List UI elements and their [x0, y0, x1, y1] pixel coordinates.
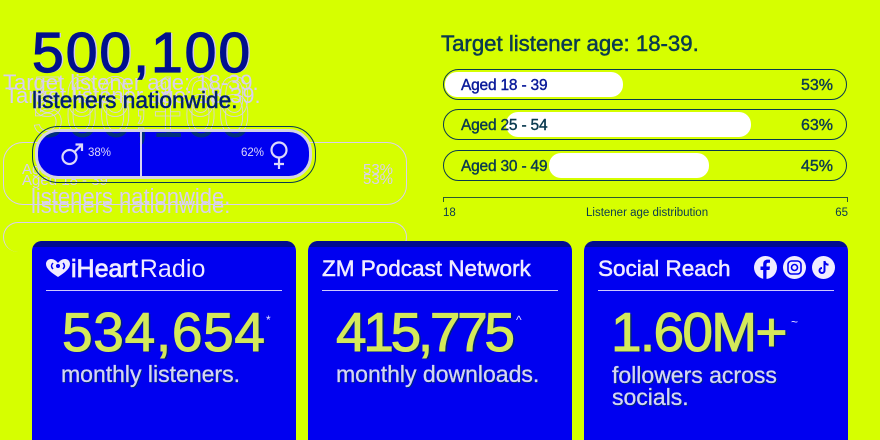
- stat number: 1.60M+: [611, 301, 786, 363]
- icon: female symbol: [270, 141, 288, 169]
- ghost artefact layer: 53%: [363, 171, 393, 188]
- panel: ZM Podcast Network: [308, 241, 572, 440]
- headline caption: listeners nationwide.: [32, 87, 238, 113]
- female share: 62%: [241, 147, 264, 159]
- gender divider: [140, 130, 142, 178]
- age bar: 25-54: 63%: [801, 117, 833, 134]
- ghost artefact layer: Target listener age: 18-39.: [5, 83, 261, 108]
- age heading: Target listener age: 18-39.: [441, 31, 699, 56]
- ghost artefact layer: Aged 18 - 39: [22, 161, 108, 178]
- age bar: 18-39: 53%: [801, 77, 833, 94]
- axis end: 65: [835, 207, 848, 219]
- ghost artefact layer: Aged 18 - 39: [22, 172, 108, 189]
- stat number: 415,775: [336, 301, 512, 363]
- ghost artefact layer: listeners nationwide.: [31, 184, 230, 209]
- stat number: 534,654: [62, 301, 266, 363]
- stat caption: monthly downloads.: [336, 361, 539, 387]
- gender split pill: [32, 126, 316, 183]
- age bar: 30-49: Aged 30 - 49: [461, 158, 547, 175]
- age bar: 30-49: [443, 150, 847, 181]
- age bar: 30-49: 45%: [801, 158, 833, 175]
- icon: iHeart logo: [46, 259, 70, 277]
- ghost artefact layer: Target listener age: 18-39.: [3, 70, 259, 95]
- ghost artefact layer: 53%: [363, 161, 393, 178]
- headline number: 500,100: [32, 21, 252, 85]
- panel: iHeartRadio: [32, 241, 296, 440]
- stat caption: monthly listeners.: [61, 361, 240, 387]
- age bar: 25-54: Aged 25 - 54: [461, 117, 547, 134]
- male share: 38%: [88, 147, 111, 159]
- pill fill: [35, 129, 312, 179]
- panel: Social Reach: [584, 241, 848, 440]
- footnote mark: ~: [791, 315, 798, 329]
- icon: Instagram: [783, 256, 806, 279]
- card title: ZM Podcast Network: [322, 256, 531, 281]
- stat caption: followers across socials.: [612, 362, 777, 410]
- age bar: 25-54: [443, 109, 847, 140]
- age axis: [443, 197, 848, 219]
- footnote mark: *: [266, 313, 271, 327]
- icon: TikTok: [812, 256, 835, 279]
- card title: Social Reach: [598, 256, 731, 281]
- footnote mark: ^: [516, 313, 522, 327]
- icon: Facebook: [754, 256, 777, 279]
- axis title: Listener age distribution: [586, 207, 708, 219]
- age bar: 18-39: Aged 18 - 39: [461, 77, 547, 94]
- axis start: 18: [443, 207, 456, 219]
- age bar: 18-39: [443, 69, 847, 100]
- ghost artefact layer: listeners nationwide.: [31, 193, 230, 218]
- icon: male symbol: [61, 143, 84, 166]
- ghost artefact layer: [3, 70, 407, 252]
- card title: iHeartRadio: [71, 255, 206, 283]
